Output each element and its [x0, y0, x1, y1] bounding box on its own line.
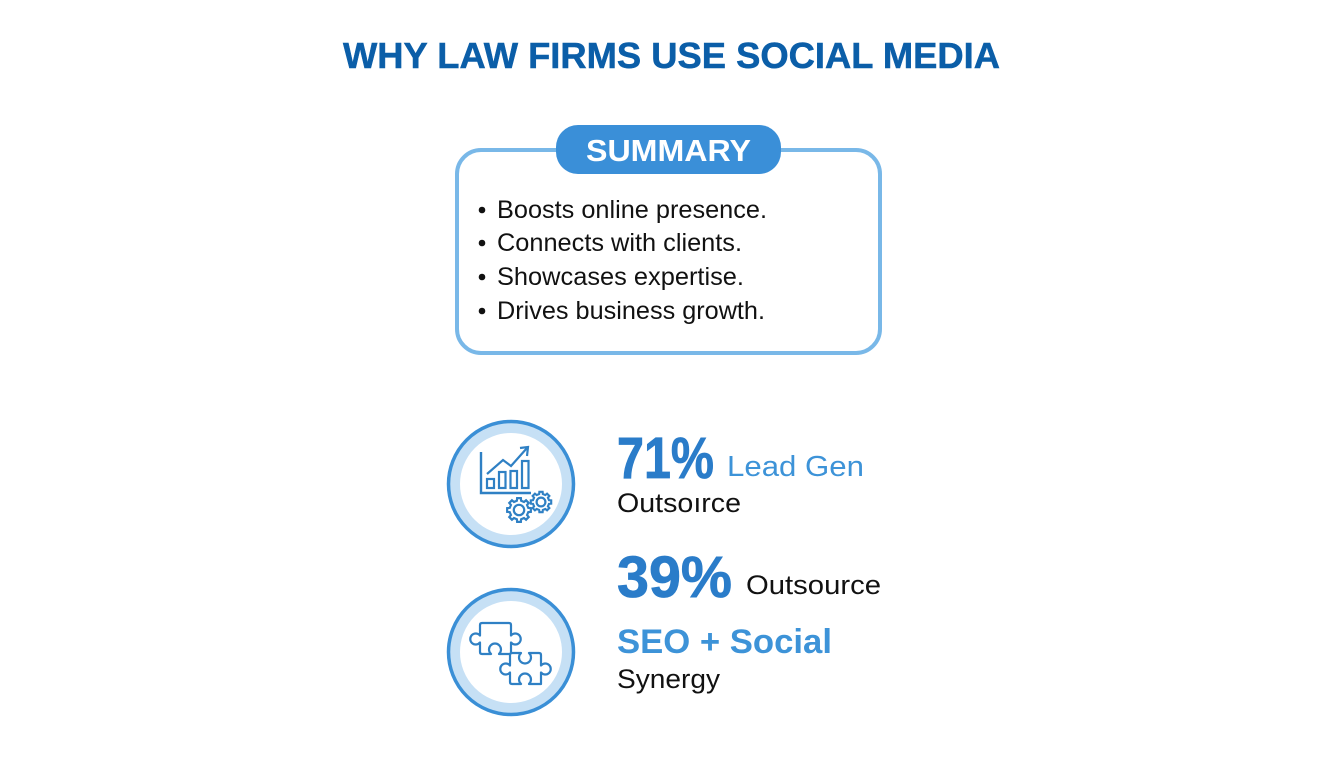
stat: SEO + social synergy	[617, 623, 832, 694]
stat: SEO + social synergy: Synergy	[617, 664, 721, 694]
stat: 39% outsource: Outsource	[746, 570, 881, 600]
icon: puzzle pieces	[448, 590, 574, 714]
stat: 71% lead gen	[617, 426, 864, 518]
icon: growth chart with gears	[448, 422, 574, 546]
summary heading pill: SUMMARY	[586, 133, 751, 168]
summary bullet list: Showcases expertise.	[497, 263, 744, 291]
panel: summary	[457, 125, 880, 353]
stat: SEO + social synergy: SEO + Social	[617, 623, 832, 661]
stat: 39% outsource	[617, 545, 881, 610]
summary bullet list	[479, 196, 767, 325]
title: WHY LAW FIRMS USE SOCIAL MEDIA	[343, 35, 1000, 76]
summary bullet list: Connects with clients.	[497, 229, 742, 257]
stat: 71% lead gen: 71%	[617, 426, 714, 491]
stat: 71% lead gen: Lead Gen	[727, 451, 864, 483]
summary bullet list: Boosts online presence.	[497, 196, 767, 224]
summary bullet list: Drives business growth.	[497, 297, 765, 325]
stat: 71% lead gen: Outsoırce	[617, 488, 741, 518]
summary box outline	[457, 150, 880, 353]
summary heading pill	[556, 125, 781, 174]
stat: 39% outsource: 39%	[617, 545, 732, 610]
